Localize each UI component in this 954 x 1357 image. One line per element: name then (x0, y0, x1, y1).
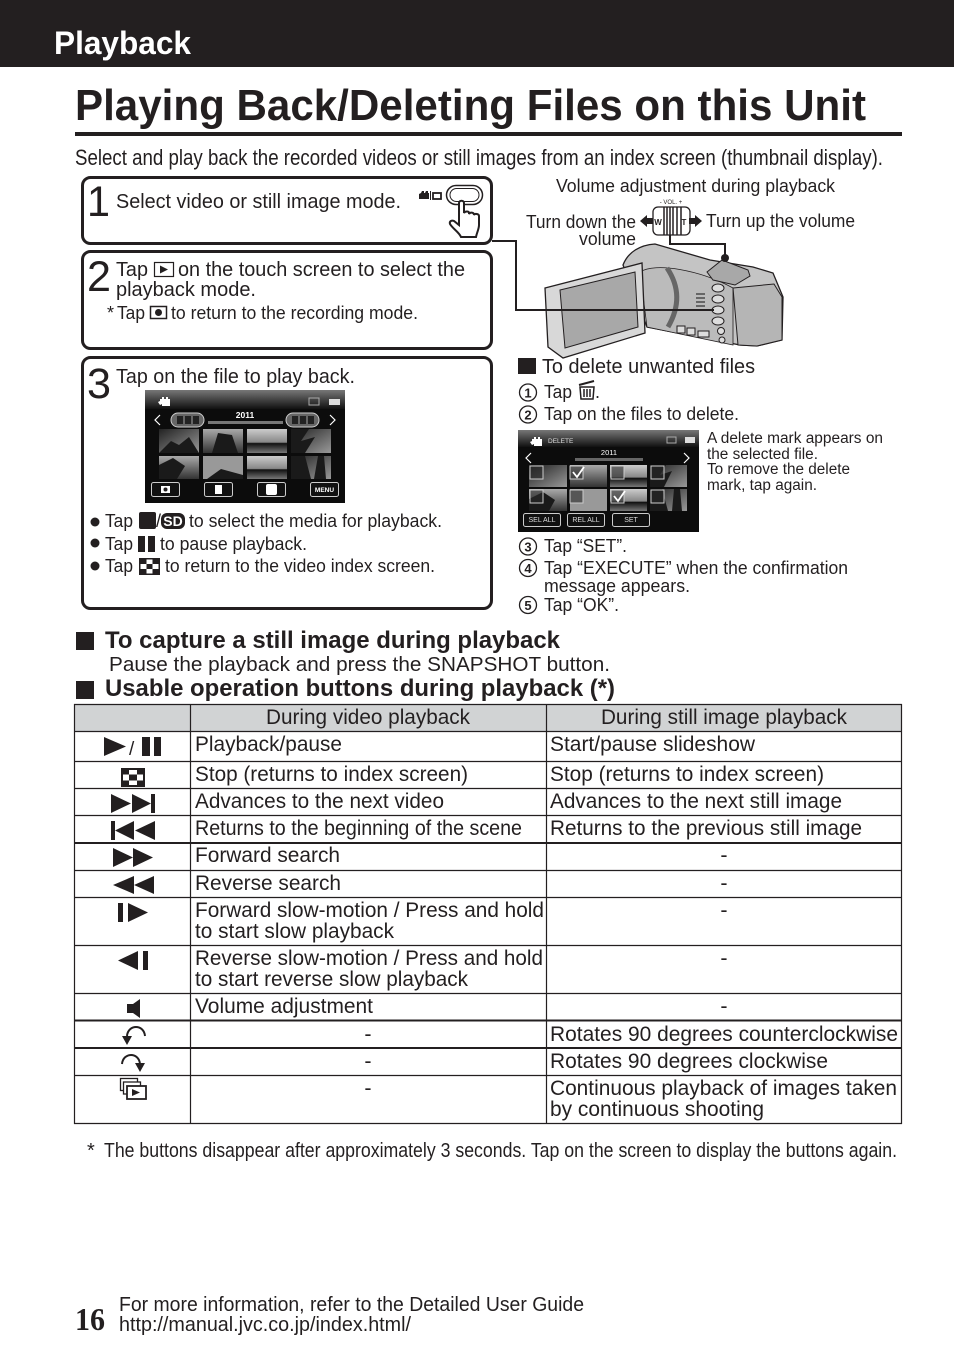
section header band: Playback (54, 25, 191, 61)
table header row: During video playback (266, 705, 470, 729)
footer reference: For more information, refer to the Detailed User Guide (119, 1294, 584, 1316)
icon: next (111, 794, 155, 813)
step 2 text: Tap (116, 258, 148, 281)
icon: volume switch with arrows: - VOL. + (660, 200, 683, 206)
icon: continuous images (120, 1078, 146, 1099)
delete step 3: 3 (524, 540, 532, 554)
bullet: pause (90, 534, 307, 554)
delete screen mockup: SET (624, 517, 639, 524)
icon: volume switch with arrows (640, 200, 729, 262)
delete heading: To delete unwanted files (542, 356, 755, 378)
camera illustration (545, 244, 783, 358)
bullet: select media: / (156, 511, 161, 531)
delete screen mockup: DELETE (548, 438, 574, 445)
icon: play and pause: / (129, 739, 135, 760)
delete step 3: Tap “SET”. (544, 536, 627, 556)
icon: play and pause (104, 737, 161, 760)
column: during video playback: Forward slow-motion / Press and hold (195, 898, 544, 922)
delete step 4: message appears. (544, 576, 690, 596)
bullet: select media: Tap (105, 511, 133, 531)
footnote: * (87, 1140, 95, 1162)
column: during video playback: Reverse search (195, 871, 341, 895)
panel: step 3 (82, 358, 492, 608)
icon: forward search (113, 848, 153, 867)
table header row: During still image playback (601, 705, 847, 729)
heading: capture still image: To capture a still image during playback (105, 627, 561, 654)
capture instruction: Pause the playback and press the SNAPSHOT button. (109, 653, 610, 676)
panel: step 2 (82, 252, 492, 348)
footer reference (119, 1294, 584, 1336)
column: during video playback: Returns to the beginning of the scene (195, 816, 522, 840)
delete screen mockup: REL ALL (572, 517, 600, 524)
step 2 text: playback mode. (116, 278, 256, 301)
icon: volume switch with arrows: T (682, 218, 687, 227)
icon: mode switch with hand (419, 186, 482, 237)
connector line from step 1 to camera (492, 241, 714, 310)
column: during still image playback: - (720, 898, 728, 922)
column: during still image playback: - (720, 994, 728, 1018)
delete step 2: Tap on the files to delete. (544, 404, 739, 424)
step 2 text (116, 258, 465, 301)
column: during still image playback: Stop (returns to index screen) (550, 762, 824, 786)
note: return to recording: * (107, 303, 114, 323)
volume down label: volume (579, 229, 636, 249)
delete screen mockup: 2011 (601, 448, 617, 457)
column: during video playback: Volume adjustment (195, 994, 373, 1018)
column: during video playback: Stop (returns to index screen) (195, 762, 468, 786)
page number: 16 (75, 1301, 105, 1337)
icon: slow forward (118, 903, 148, 922)
column: during still image playback: Returns to the previous still image (550, 816, 862, 840)
column: during video playback: Reverse slow-motion / Press and hold (195, 946, 543, 970)
icon: volume switch with arrows: W (654, 218, 662, 227)
step number 3: 3 (87, 360, 111, 408)
delete mark note (707, 430, 883, 494)
step 3 text: Tap on the file to play back. (116, 365, 355, 388)
bullet: select media: SD (163, 513, 183, 529)
icon: reverse search (113, 876, 154, 894)
column: during still image playback: Rotates 90 degrees counterclockwise (550, 1022, 898, 1046)
step 1 text: Select video or still image mode. (116, 190, 401, 213)
delete step 1 (520, 381, 600, 402)
section header band (0, 0, 954, 67)
delete mark note: mark, tap again. (707, 477, 817, 494)
bullet: pause: Tap (105, 534, 133, 554)
delete step 5: 5 (524, 598, 532, 613)
icon: stop index (121, 768, 145, 787)
step number 1: 1 (87, 178, 110, 226)
icon: previous (111, 821, 155, 840)
volume down label (526, 212, 636, 249)
step number 2: 2 (87, 253, 111, 301)
icon: slow reverse (118, 951, 148, 970)
delete step 4: Tap “EXECUTE” when the confirmation (544, 558, 848, 578)
heading: usable buttons: Usable operation buttons during playback (*) (105, 675, 615, 702)
delete mark note: A delete mark appears on (707, 430, 883, 447)
icon: rotate clockwise (122, 1055, 145, 1072)
icon: volume (127, 999, 140, 1018)
column: during still image playback: Continuous playback of images taken (550, 1076, 897, 1100)
column: during still image playback (550, 732, 898, 1121)
volume up label: Turn up the volume (706, 211, 855, 231)
column: during still image playback: - (720, 946, 728, 970)
bullet: return to index: to return to the video index screen. (165, 556, 435, 576)
bullet: pause: to pause playback. (160, 534, 307, 554)
delete step 2: 2 (524, 408, 532, 422)
delete step 5: Tap “OK”. (544, 595, 619, 615)
volume down label: Turn down the (526, 212, 636, 232)
bullet: return to index: Tap (105, 556, 133, 576)
footer reference: http://manual.jvc.co.jp/index.html/ (119, 1314, 411, 1336)
note: return to recording: Tap (117, 303, 145, 323)
column: during video playback: - (364, 1049, 372, 1073)
delete step 1: 1 (524, 386, 532, 400)
title: Playing Back/Deleting Files on this Unit (75, 81, 866, 130)
column: during still image playback: - (720, 871, 728, 895)
column: during still image playback: - (720, 843, 728, 867)
column: during video playback: Advances to the next video (195, 789, 444, 813)
delete mark note: the selected file. (707, 446, 818, 463)
index screen mockup: 2011 (236, 410, 254, 420)
column: during video playback: to start slow playback (195, 919, 394, 943)
delete step 4: 4 (524, 561, 532, 576)
delete step 1: . (595, 382, 600, 402)
column: during video playback: to start reverse slow playback (195, 967, 468, 991)
column: during still image playback: Start/pause slideshow (550, 732, 755, 756)
column: during still image playback: Advances to the next still image (550, 789, 842, 813)
delete step 4 (520, 558, 848, 596)
column: during video playback: - (364, 1076, 372, 1100)
delete step 1: Tap (544, 382, 572, 402)
bullet: select media: to select the media for playback. (189, 511, 442, 531)
index screen mockup: MENU (315, 487, 334, 494)
operation buttons table (74, 704, 902, 1124)
column: during video playback (195, 732, 544, 1100)
delete mark note: To remove the delete (707, 461, 850, 478)
column: during video playback: - (364, 1022, 372, 1046)
icon: rotate counterclockwise (122, 1027, 145, 1045)
column: during video playback: Forward search (195, 843, 340, 867)
table header row (266, 705, 847, 729)
column: during still image playback: Rotates 90 degrees clockwise (550, 1049, 828, 1073)
column: during video playback: Playback/pause (195, 732, 342, 756)
step 2 text: on the touch screen to select the (178, 258, 465, 281)
panel: step 1 (82, 178, 492, 244)
index screen mockup (145, 390, 345, 503)
delete screen mockup: SEL ALL (528, 517, 556, 524)
delete screen mockup (518, 430, 699, 532)
column: during still image playback: by continuous shooting (550, 1097, 764, 1121)
note: return to recording: to return to the recording mode. (171, 303, 418, 323)
volume heading: Volume adjustment during playback (556, 176, 836, 196)
